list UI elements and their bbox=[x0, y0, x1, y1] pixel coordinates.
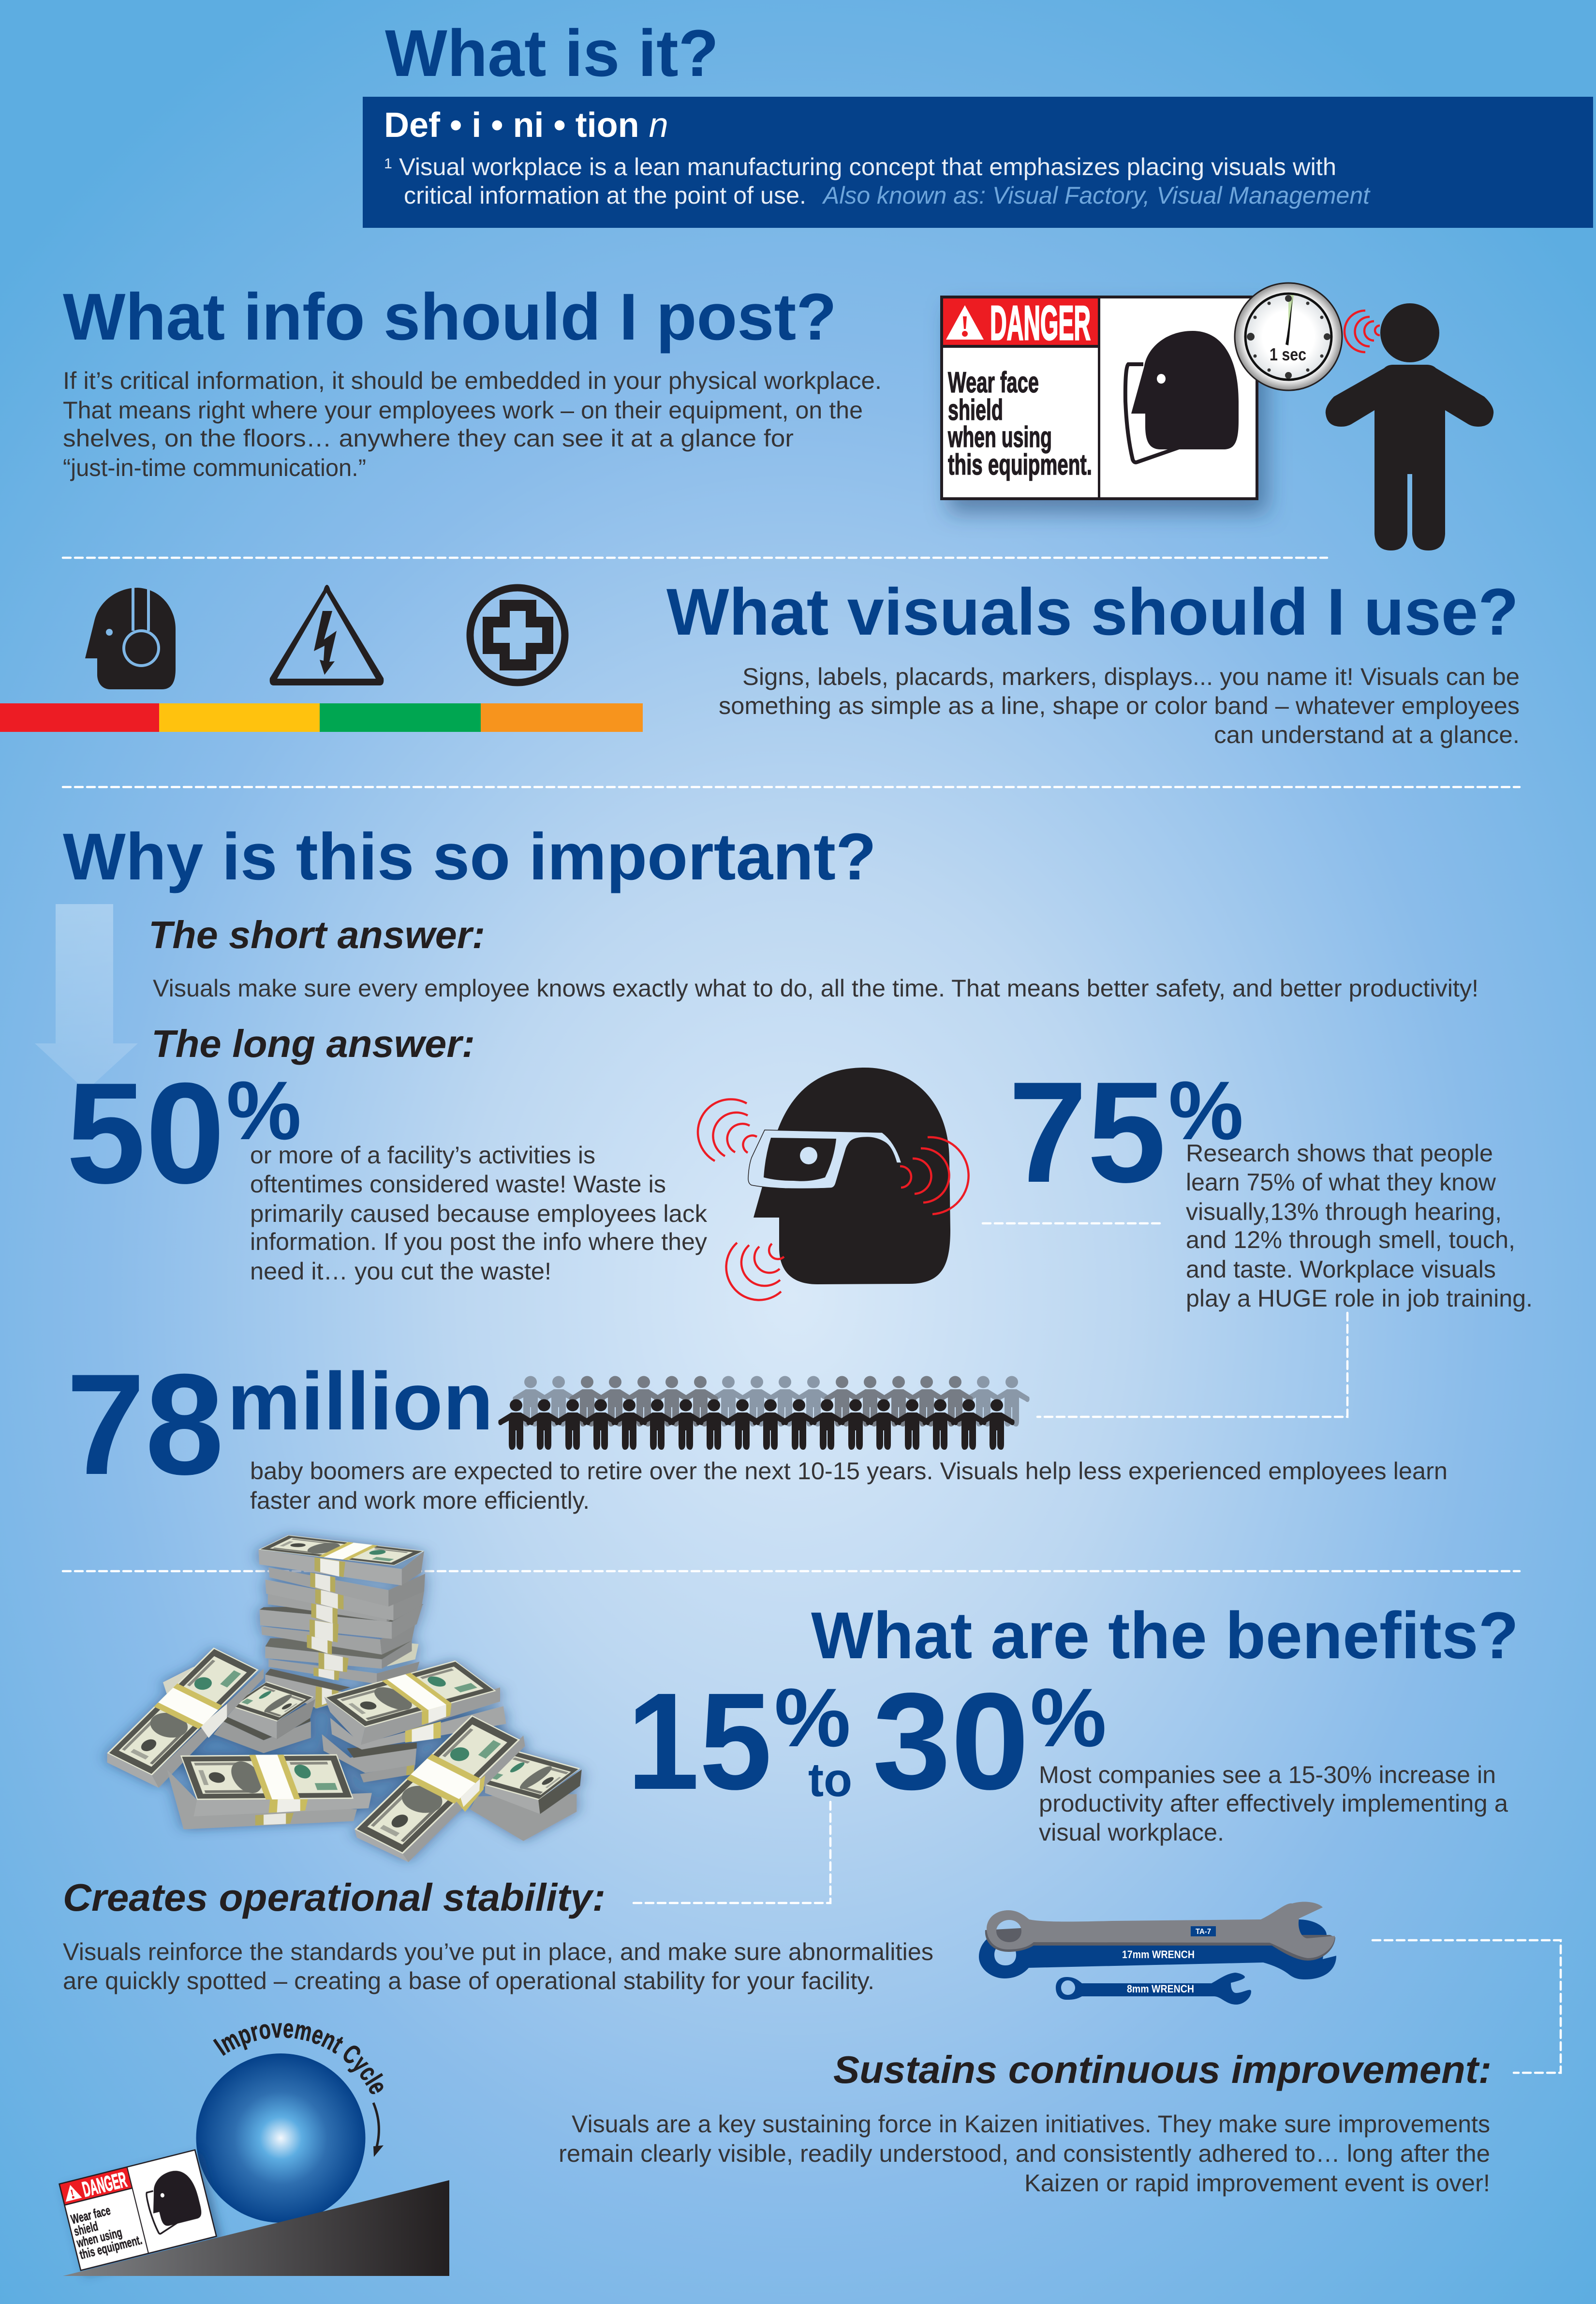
panel: definition: critical information at the point of use. bbox=[404, 182, 806, 209]
text: 78 million: baby boomers are expected to retire over the next 10-15 years. Visuals help less experienced employees learn bbox=[250, 1457, 1448, 1485]
text: what info paragraph: That means right where your employees work – on their equipment, on the bbox=[63, 397, 863, 424]
color bands bbox=[0, 703, 643, 732]
heading: why important: Why is this so important? bbox=[63, 820, 876, 894]
text: 75 percent: play a HUGE role in job training. bbox=[1186, 1285, 1533, 1312]
connector bbox=[1373, 1940, 1561, 2073]
heading: what visuals: What visuals should I use? bbox=[666, 575, 1519, 649]
text: 75 percent: and taste. Workplace visuals bbox=[1186, 1256, 1496, 1283]
small danger sign: when using bbox=[75, 2225, 123, 2250]
icon: wrenches: TA-7 bbox=[1196, 1928, 1211, 1936]
text: visuals paragraph bbox=[719, 663, 1520, 748]
danger sign bbox=[940, 296, 1258, 500]
text: what info paragraph: shelves, on the floors… anywhere they can see it at a glance for bbox=[63, 425, 794, 452]
stat: 78 million: 78 bbox=[66, 1344, 224, 1504]
icon: first aid cross bbox=[470, 588, 565, 683]
text: 50 percent: information. If you post the info where they bbox=[250, 1228, 707, 1255]
danger sign: Wear face bbox=[948, 366, 1039, 399]
illustration: money pile bbox=[107, 1535, 582, 1862]
text: 50 percent: primarily caused because employees lack bbox=[250, 1200, 708, 1227]
icon: clock bbox=[1235, 283, 1342, 390]
text: continuous improvement bbox=[559, 2111, 1490, 2197]
stat: 75 percent: 75 bbox=[1008, 1052, 1166, 1212]
text: visuals paragraph: Signs, labels, placards, markers, displays... you name it! Visuals can be bbox=[742, 663, 1520, 690]
panel: definition: Def • i • ni • tion n bbox=[384, 106, 668, 145]
stat: 15 to 30 percent: 15 bbox=[627, 1665, 772, 1818]
panel: definition: Visual workplace is a lean manufacturing concept that emphasizes placing visuals with bbox=[392, 153, 1336, 180]
people row bbox=[498, 1376, 1030, 1450]
heading: what is it: What is it? bbox=[385, 16, 719, 90]
divider bbox=[63, 557, 1327, 559]
text: short answer: Visuals make sure every employee knows exactly what to do, all the time. That means better safety, and better productivity! bbox=[153, 975, 1478, 1002]
text: 50 percent bbox=[250, 1142, 708, 1285]
stat: 15 to 30 percent: % bbox=[1030, 1671, 1107, 1764]
danger sign: this equipment. bbox=[948, 448, 1092, 481]
stat: 15 to 30 percent: % bbox=[774, 1671, 851, 1764]
illustration: improvement ball on ramp bbox=[58, 2023, 449, 2279]
text: visuals paragraph: something as simple as a line, shape or color band – whatever employees bbox=[719, 692, 1520, 719]
icon: electric hazard bbox=[270, 585, 384, 685]
icon: wrenches: 17mm WRENCH bbox=[1122, 1948, 1195, 1961]
stat: 75 percent: % bbox=[1168, 1064, 1243, 1157]
text: 78 million bbox=[250, 1457, 1448, 1514]
small danger sign: DANGER bbox=[80, 2168, 129, 2201]
stat: 15 to 30 percent: 30 bbox=[872, 1665, 1029, 1818]
text: 50 percent: or more of a facility’s activities is bbox=[250, 1142, 595, 1169]
illustration: improvement ball on ramp: Improvement Cycle bbox=[213, 2023, 383, 2095]
icon: head with goggles bbox=[698, 1068, 969, 1300]
text: 50 percent: oftentimes considered waste! Waste is bbox=[250, 1171, 666, 1198]
text: continuous improvement: remain clearly visible, readily understood, and consistently adhered to… long after the bbox=[559, 2140, 1490, 2167]
icon: clock: 1 sec bbox=[1270, 344, 1306, 364]
danger sign: when using bbox=[947, 421, 1052, 453]
text: benefits: productivity after effectively implementing a bbox=[1039, 1790, 1508, 1817]
subheading: long answer: The long answer: bbox=[151, 1022, 475, 1065]
text: visuals paragraph: can understand at a glance. bbox=[1214, 721, 1520, 748]
connector bbox=[983, 1223, 1347, 1417]
text: continuous improvement: Kaizen or rapid improvement event is over! bbox=[1024, 2170, 1490, 2197]
icon: wrenches: 8mm WRENCH bbox=[1127, 1983, 1194, 1995]
stat: 78 million: million bbox=[227, 1355, 493, 1447]
danger sign: shield bbox=[948, 394, 1003, 426]
text: 75 percent bbox=[1186, 1140, 1533, 1312]
stat: 50 percent: 50 bbox=[66, 1053, 225, 1213]
panel: definition: 1 bbox=[384, 156, 392, 172]
panel: definition: Also known as: Visual Factory, Visual Management bbox=[822, 182, 1371, 209]
text: 75 percent: Research shows that people bbox=[1186, 1140, 1493, 1167]
text: 78 million: faster and work more efficiently. bbox=[250, 1487, 590, 1514]
text: 75 percent: visually,13% through hearing, bbox=[1186, 1198, 1502, 1225]
icon: hearing protection bbox=[85, 586, 176, 689]
divider bbox=[63, 1570, 1520, 1572]
text: operational stability bbox=[63, 1938, 933, 1994]
danger sign: DANGER bbox=[990, 296, 1091, 350]
stat: 50 percent bbox=[66, 1053, 301, 1213]
stat: 15 to 30 percent: to bbox=[808, 1753, 852, 1806]
panel: definition bbox=[363, 97, 1593, 228]
subheading: operational stability: Creates operational stability: bbox=[63, 1876, 606, 1919]
text: 75 percent: and 12% through smell, touch, bbox=[1186, 1226, 1515, 1253]
divider bbox=[63, 786, 1520, 788]
arrow bbox=[35, 904, 138, 1091]
text: operational stability: Visuals reinforce the standards you’ve put in place, and make sure abnormalities bbox=[63, 1938, 933, 1965]
text: benefits: Most companies see a 15-30% increase in bbox=[1039, 1761, 1496, 1788]
icon: wrenches bbox=[979, 1902, 1336, 2005]
subheading: continuous improvement: Sustains continuous improvement: bbox=[833, 2048, 1492, 2091]
text: continuous improvement: Visuals are a key sustaining force in Kaizen initiatives. They make sure improvements bbox=[572, 2111, 1490, 2138]
text: what info paragraph: If it’s critical information, it should be embedded in your physical workplace. bbox=[63, 367, 882, 394]
text: what info paragraph bbox=[63, 367, 882, 481]
stat: 15 to 30 percent bbox=[627, 1665, 1107, 1818]
text: benefits bbox=[1039, 1761, 1508, 1846]
small danger sign bbox=[59, 2149, 217, 2271]
connector bbox=[631, 1802, 830, 1903]
text: benefits: visual workplace. bbox=[1039, 1819, 1224, 1846]
text: 75 percent: learn 75% of what they know bbox=[1186, 1169, 1496, 1196]
small danger sign: Wear face bbox=[69, 2203, 112, 2227]
text: 50 percent: need it… you cut the waste! bbox=[250, 1258, 551, 1285]
icon: person with signal bbox=[1326, 303, 1493, 550]
heading: benefits: What are the benefits? bbox=[811, 1599, 1519, 1673]
stat: 75 percent bbox=[1008, 1052, 1243, 1212]
stat: 78 million bbox=[66, 1344, 493, 1504]
heading: what info should I post: What info should I post? bbox=[63, 280, 837, 354]
text: what info paragraph: “just-in-time communication.” bbox=[63, 454, 366, 481]
small danger sign: shield bbox=[72, 2219, 100, 2239]
small danger sign: this equipment. bbox=[78, 2232, 144, 2262]
stat: 50 percent: % bbox=[226, 1064, 301, 1157]
text: operational stability: are quickly spotted – creating a base of operational stability for your facility. bbox=[63, 1967, 874, 1994]
subheading: short answer: The short answer: bbox=[148, 913, 485, 956]
